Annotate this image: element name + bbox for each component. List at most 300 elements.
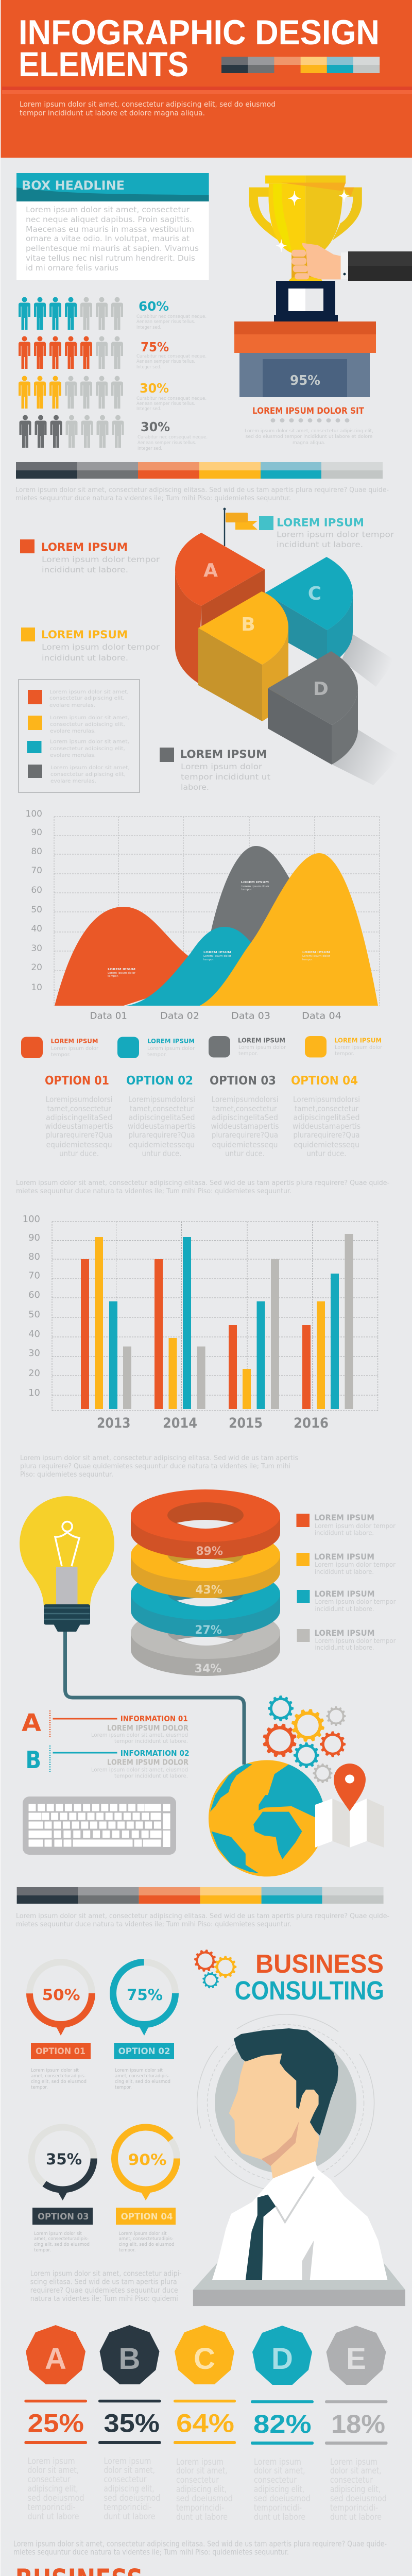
options row: plurarequirere?Qua xyxy=(294,1130,359,1140)
options row: equidemietessequ xyxy=(46,1140,112,1149)
legend box: consectetur adipiscing elit, xyxy=(50,746,125,752)
area chart: 90 xyxy=(31,827,42,838)
paragraph: mietes sequuntur duce natura ta videntes ile; Tum mihi Piso: quidemietes sequuntur. xyxy=(15,495,291,502)
bar chart: 100 xyxy=(23,1214,40,1225)
information A: Lorem ipsum dolor sit amet, eiusmod xyxy=(91,1732,188,1738)
illustration: businessman xyxy=(193,2014,405,2306)
ring chart legend: LOREM IPSUM xyxy=(314,1589,375,1599)
badge D: consectetur xyxy=(254,2475,297,2485)
header banner xyxy=(1,0,412,158)
information B xyxy=(26,1745,190,1780)
options row: widdeustamapertis xyxy=(211,1122,279,1131)
badge C: dunt ut labore xyxy=(176,2512,228,2522)
chart legend tiles: tempor. xyxy=(51,1052,71,1058)
donut 90% option 04: OPTION 04 xyxy=(121,2212,173,2222)
chart legend tiles: Lorem ipsum dolor xyxy=(335,1045,383,1050)
label: teal: LOREM IPSUM xyxy=(277,516,364,529)
chart legend tiles: tempor. xyxy=(147,1052,167,1058)
options row: widdeustamapertis xyxy=(128,1122,196,1131)
chart legend tiles: LOREM IPSUM xyxy=(147,1038,195,1045)
row 30% grey: Aenean semper risus tellus. xyxy=(138,440,196,446)
ring 34% xyxy=(131,1606,280,1676)
bar chart: 30 xyxy=(28,1348,40,1359)
badge B: Lorem ipsum xyxy=(104,2456,151,2467)
badge E: temporincidi- xyxy=(330,2503,378,2513)
information B: Lorem ipsum dolor sit amet, eiusmod xyxy=(91,1767,188,1773)
legend box: Lorem ipsum dolor sit amet, xyxy=(50,739,129,745)
label: yellow: incididunt ut labore. xyxy=(42,653,128,663)
donut 35% option 03: OPTION 03 xyxy=(38,2212,89,2222)
options row: equidemietessequ xyxy=(129,1140,195,1149)
panel: box headline: vitae tellus nec nisl rutrum hendrerit. Duis xyxy=(26,253,195,263)
heading: business consulting xyxy=(193,1948,384,2005)
information B: LOREM IPSUM DOLOR xyxy=(107,1758,188,1767)
label: grey: tempor incididunt ut xyxy=(181,772,270,782)
bar chart: 90 xyxy=(28,1232,40,1243)
options row: adipiscingelitaSed xyxy=(46,1113,112,1122)
badge D: Lorem ipsum xyxy=(254,2457,301,2467)
badge C: sed doeiusmod xyxy=(176,2494,233,2504)
chart legend tiles: LOREM IPSUM xyxy=(238,1037,285,1044)
badge C: C xyxy=(194,2342,215,2376)
options row: tamet,consectetur xyxy=(47,1104,111,1113)
area chart: 70 xyxy=(31,866,42,876)
area chart: tempor. xyxy=(242,888,252,891)
badge E: Lorem ipsum xyxy=(330,2457,377,2467)
badge D: temporincidi- xyxy=(254,2503,302,2513)
area chart: 60 xyxy=(31,885,42,895)
row 60%: Integer sed. xyxy=(136,325,161,330)
donut 50% option 01: Lorem ipsum dolor sit xyxy=(31,2068,79,2073)
badge A xyxy=(24,2325,87,2522)
trophy caption xyxy=(245,406,373,446)
area chart: 50 xyxy=(31,905,42,915)
label: orange xyxy=(20,539,160,574)
badge E: sed doeiusmod xyxy=(330,2494,387,2504)
row 75%: Integer sed. xyxy=(136,365,161,370)
ring chart legend: Lorem ipsum dolor tempor xyxy=(315,1522,396,1530)
badge A: sed doeiusmod xyxy=(28,2493,84,2503)
badge D: dunt ut labore xyxy=(254,2512,305,2522)
row 30% yellow: Aenean semper risus tellus. xyxy=(136,401,195,406)
bar chart: 40 xyxy=(28,1329,40,1340)
label: teal: incididunt ut labore. xyxy=(277,540,363,549)
area chart: LOREM IPSUM xyxy=(241,881,269,884)
area chart: tempor. xyxy=(203,958,214,961)
options row: plurarequirere?Qua xyxy=(129,1130,195,1140)
panel: box headline xyxy=(16,173,209,280)
row 60% xyxy=(19,297,207,330)
badge A: dunt ut labore xyxy=(28,2512,79,2522)
label: orange: Lorem ipsum dolor tempor xyxy=(42,555,160,564)
legend box: evolare merulas. xyxy=(50,753,96,758)
row 60%: 60% xyxy=(139,299,169,314)
label: orange: incididunt ut labore. xyxy=(42,565,128,574)
area chart: LOREM IPSUM xyxy=(302,951,330,954)
panel: box headline: nec neque aliquet dapibus. Proin sagittis. xyxy=(26,215,192,224)
donut 50% option 01: OPTION 01 xyxy=(36,2046,85,2057)
panel: box headline: Maecenas eu mauris in massa vestibulum xyxy=(26,225,194,234)
panel: box headline: id mi ornare felis varius xyxy=(26,263,118,273)
bars 2014 xyxy=(154,1237,205,1409)
paragraph: Piso: quidemietes sequuntur. xyxy=(20,1471,113,1479)
header intro text: Lorem ipsum dolor sit amet, consectetur adipiscing elit, sed do eiusmod xyxy=(20,100,276,109)
badge E: 18% xyxy=(331,2410,385,2438)
paragraph: mietes sequuntur duce natura ta videntes ile; Tum mihi Piso: quidemietes sequuntur. xyxy=(16,1188,291,1195)
header intro text xyxy=(20,100,276,117)
ring chart legend: LOREM IPSUM xyxy=(314,1628,375,1638)
donut 75% option 02: amet, consecteturadipis- xyxy=(115,2074,169,2079)
bar chart: 2015 xyxy=(229,1415,263,1431)
ring 27% xyxy=(131,1567,280,1637)
ring chart legend xyxy=(297,1513,396,1651)
paragraph xyxy=(13,2539,387,2557)
donut 75% option 02: OPTION 02 xyxy=(118,2046,170,2057)
badge B: temporincidi- xyxy=(104,2502,151,2513)
options row: OPTION 04 xyxy=(291,1074,358,1088)
label: teal xyxy=(259,516,394,549)
label: grey: labore. xyxy=(181,783,209,792)
donut 90% option 04: tempor. xyxy=(119,2248,136,2253)
ring 89%: 89% xyxy=(196,1545,223,1558)
chart: isometric blocks A B C D xyxy=(175,508,401,785)
bar chart xyxy=(23,1214,378,1431)
ring chart legend: Lorem ipsum dolor tempor xyxy=(315,1598,396,1605)
information B: tempor incididunt ut labore. xyxy=(114,1773,188,1780)
donut 50% option 01: amet, consecteturadipis- xyxy=(31,2074,85,2079)
trophy caption: LOREM IPSUM DOLOR SIT xyxy=(252,406,364,416)
bars 2013 xyxy=(81,1237,131,1409)
area chart: 80 xyxy=(31,846,42,857)
area chart: 40 xyxy=(31,924,42,934)
flag xyxy=(224,508,258,546)
badge A: 25% xyxy=(28,2409,84,2438)
ring 34%: 34% xyxy=(195,1663,221,1675)
badge E: dolor sit amet, xyxy=(330,2466,381,2476)
options row: equidemietessequ xyxy=(212,1140,278,1149)
paragraph: Lorem ipsum dolor sit amet, consectetur adipiscing elitasa. Sed wid de us tam apertis plura requirere? Quae quide- xyxy=(16,1912,389,1920)
badge C: consectetur xyxy=(176,2475,219,2485)
options row: adipiscingelitaSed xyxy=(212,1113,278,1122)
badge D xyxy=(251,2326,314,2522)
podium with 95%: 95% xyxy=(290,373,320,388)
area chart: tempor. xyxy=(108,975,118,978)
heading: business consulting: BUSINESS xyxy=(255,1949,384,1978)
row 30% yellow: 30% xyxy=(140,381,169,396)
donut 75% option 02: cing elit, sed do eiusmod xyxy=(115,2079,170,2084)
bar chart: 2013 xyxy=(97,1415,131,1431)
donut 90% option 04: amet, consecteturadipis- xyxy=(119,2236,174,2242)
icon: map and location pin xyxy=(315,1764,384,1848)
label: orange: LOREM IPSUM xyxy=(41,541,128,553)
badge C: dolor sit amet, xyxy=(176,2466,228,2476)
badge A: A xyxy=(45,2342,66,2376)
ring chart legend: LOREM IPSUM xyxy=(314,1513,374,1522)
ring 43%: 43% xyxy=(195,1584,222,1597)
area chart: LOREM IPSUM xyxy=(108,968,135,971)
bar chart: 10 xyxy=(28,1387,40,1398)
donut 75% option 02: tempor. xyxy=(115,2085,132,2090)
options row: Loremipsumdolorsi xyxy=(211,1095,278,1104)
ring 27%: 27% xyxy=(195,1624,222,1637)
area chart: Data 04 xyxy=(302,1011,341,1021)
chart legend tiles: Lorem ipsum dolor xyxy=(147,1046,195,1052)
block B: B xyxy=(241,614,255,635)
options row: untur duce. xyxy=(59,1149,99,1158)
badge D: sed doeiusmod xyxy=(254,2494,311,2504)
chart legend tiles: Lorem ipsum dolor xyxy=(238,1045,286,1050)
label: yellow xyxy=(21,628,160,663)
panel: box headline: ornare a vitae odio. In volutpat, mauris at xyxy=(26,234,190,243)
badge D: dolor sit amet, xyxy=(254,2466,305,2476)
bar chart: 50 xyxy=(28,1309,40,1320)
title: INFOGRAPHIC DESIGN xyxy=(19,13,380,52)
chart legend tiles: LOREM IPSUM xyxy=(50,1038,98,1045)
donut 50% option 01: 50% xyxy=(42,1986,80,2004)
row 30% grey: Curabitur nec consequat neque. xyxy=(138,435,208,440)
row 60%: Curabitur nec consequat neque. xyxy=(136,314,207,319)
paragraph: Lorem ipsum dolor sit amet, consectetur adipiscing elitasa. Sed wid de us tam apertis xyxy=(20,1454,298,1462)
row 30% yellow: Curabitur nec consequat neque. xyxy=(136,396,207,401)
donut 75% option 02: 75% xyxy=(127,1986,163,2004)
paragraph: mietes sequuntur duce natura ta videntes ile; Tum mihi Piso: quidemietes sequuntur. xyxy=(13,2548,289,2557)
donut 35% option 03: 35% xyxy=(46,2150,82,2168)
block A: A xyxy=(203,560,218,581)
label: grey: LOREM IPSUM xyxy=(180,748,267,760)
paragraph xyxy=(30,2270,182,2303)
badge D: adipiscing elit, xyxy=(254,2484,304,2495)
heading: business consulting: CONSULTING xyxy=(235,1976,384,2005)
stacked ring chart xyxy=(131,1489,280,1676)
donut 75% option 02: Lorem ipsum dolor sit xyxy=(115,2068,163,2073)
badge C: 64% xyxy=(176,2409,234,2438)
donut 50% option 01 xyxy=(30,1962,92,2090)
badge E: consectetur xyxy=(330,2475,373,2485)
colour strip divider 1 xyxy=(16,462,383,479)
row 30% grey xyxy=(20,415,208,451)
information A: INFORMATION 01 xyxy=(121,1714,188,1723)
row 60%: Aenean semper risus tellus. xyxy=(136,319,195,325)
information B: INFORMATION 02 xyxy=(121,1749,190,1758)
badge C: Lorem ipsum xyxy=(176,2457,224,2467)
donut 50% option 01: cing elit, sed do eiusmod xyxy=(31,2079,87,2084)
paragraph: natura ta videntes ile; Tum mihi Piso: quidemi xyxy=(30,2295,178,2303)
row 30% grey: 30% xyxy=(141,419,170,434)
donut 75% option 02 xyxy=(113,1962,175,2090)
badge E: dunt ut labore xyxy=(330,2512,382,2522)
options row: Loremipsumdolorsi xyxy=(46,1095,113,1104)
block C: C xyxy=(308,583,321,604)
badge A: temporincidi- xyxy=(28,2502,76,2513)
legend box: consectetur adipiscing elit, xyxy=(50,772,126,777)
options row: OPTION 02 xyxy=(126,1074,193,1088)
area chart: 30 xyxy=(31,943,42,954)
chart legend tiles: tempor. xyxy=(335,1051,354,1057)
options row: untur duce. xyxy=(307,1149,346,1158)
legend box: consectetur adipiscing elit, xyxy=(49,696,125,701)
colour strip divider 2 xyxy=(17,1887,384,1904)
paragraph: requirere? Quae quidemietes sequuntur duce xyxy=(30,2286,178,2295)
options row: plurarequirere?Qua xyxy=(46,1130,112,1140)
badge B: 35% xyxy=(104,2409,160,2438)
donut 35% option 03: tempor. xyxy=(34,2248,51,2253)
options row: tamet,consectetur xyxy=(213,1104,277,1113)
badge B: sed doeiusmod xyxy=(104,2493,161,2503)
icon: light bulb with cable xyxy=(20,1496,244,1765)
row 30% yellow xyxy=(19,376,207,412)
area chart: LOREM IPSUM xyxy=(203,951,231,954)
paragraph: Lorem ipsum dolor sit amet, consectetur adipiscing elitasa. Sed wid de us tam apertis plura requirere? Quae quide- xyxy=(16,1179,389,1187)
area chart: tempor. xyxy=(302,958,313,961)
panel: box headline: pellentesque mi mauris at sapien. Vivamus xyxy=(26,244,199,253)
block B xyxy=(198,591,288,721)
options row: OPTION 01 xyxy=(45,1074,109,1088)
ring chart legend: Lorem ipsum dolor tempor xyxy=(315,1561,396,1568)
row 75% xyxy=(19,336,207,370)
badge E xyxy=(325,2326,387,2522)
ring chart legend: Lorem ipsum dolor tempor xyxy=(315,1637,396,1645)
options row: tamet,consectetur xyxy=(295,1104,359,1113)
area chart: Data 03 xyxy=(231,1011,270,1021)
panel: box headline: Lorem ipsum dolor sit amet, consectetur xyxy=(26,205,190,214)
area chart: 100 xyxy=(26,809,42,819)
options row: equidemietessequ xyxy=(294,1140,359,1149)
badge A: adipiscing elit, xyxy=(28,2484,78,2494)
options row: Loremipsumdolorsi xyxy=(128,1095,195,1104)
row 30% yellow: Integer sed. xyxy=(136,406,161,412)
trophy caption: Lorem ipsum dolor sit amet, consectetur adipiscing elit, xyxy=(245,429,373,434)
chart legend tiles: LOREM IPSUM xyxy=(334,1037,382,1044)
row 30% grey: Integer sed. xyxy=(138,446,162,451)
badge E: E xyxy=(346,2342,366,2376)
header intro text: tempor incididunt ut labore et dolore magna aliqua. xyxy=(20,109,205,117)
paragraph xyxy=(16,1179,389,1195)
paragraph xyxy=(16,1912,389,1928)
row 75%: Aenean semper risus tellus. xyxy=(136,359,195,364)
trophy caption: magna aliqua. xyxy=(293,440,325,446)
trophy caption: sed do eiusmod tempor incididunt ut labore et dolore xyxy=(245,434,373,439)
legend box: Lorem ipsum dolor sit amet, xyxy=(49,689,129,695)
header colour swatch strip xyxy=(221,57,380,73)
bar chart: 80 xyxy=(28,1251,40,1262)
legend box: consectetur adipiscing elit, xyxy=(50,722,125,727)
block A xyxy=(175,533,265,683)
legend box: evolare merulas. xyxy=(50,778,96,784)
icon: keyboard xyxy=(23,1797,176,1855)
badge A: dolor sit amet, xyxy=(28,2465,79,2476)
chart legend tiles: tempor. xyxy=(238,1051,258,1057)
label: grey: Lorem ipsum dolor xyxy=(181,762,263,771)
ring 43% xyxy=(131,1529,280,1598)
paragraph: Lorem ipsum dolor sit amet, consectetur adipiscing elitasa. Sed wid de us tam apertis plura requirere? Quae quide- xyxy=(15,486,389,494)
information B: B xyxy=(26,1746,41,1774)
badge A: Lorem ipsum xyxy=(28,2456,75,2467)
bar chart: 2016 xyxy=(294,1415,329,1431)
badge B: consectetur xyxy=(104,2475,146,2485)
badge B: B xyxy=(119,2342,140,2376)
area chart: Lorem ipsum dolor xyxy=(242,885,270,888)
badge B: dunt ut labore xyxy=(104,2512,156,2522)
badge D: 82% xyxy=(253,2410,312,2438)
donut 50% option 01: tempor. xyxy=(31,2085,48,2090)
paragraph: Lorem ipsum dolor sit amet, consectetur adipi- xyxy=(30,2270,182,2278)
paragraph xyxy=(15,486,389,502)
row 75%: 75% xyxy=(141,340,169,354)
options row: untur duce. xyxy=(225,1149,265,1158)
ring chart legend: LOREM IPSUM xyxy=(314,1552,374,1562)
block D xyxy=(268,651,358,765)
label: yellow: Lorem ipsum dolor tempor xyxy=(42,642,160,652)
bar chart: 20 xyxy=(28,1368,40,1379)
bars 2015 xyxy=(229,1259,279,1409)
paragraph: scing elitasa. Sed wid de us tam apertis plura xyxy=(30,2278,177,2286)
area chart: Data 02 xyxy=(160,1011,199,1021)
title: ELEMENTS xyxy=(19,45,188,84)
options row: adipiscingelitaSed xyxy=(294,1113,359,1122)
options row: untur duce. xyxy=(142,1149,181,1158)
badge B: dolor sit amet, xyxy=(104,2465,155,2476)
block D: D xyxy=(313,679,329,700)
information A xyxy=(22,1708,188,1744)
title xyxy=(19,13,380,84)
information A: A xyxy=(22,1708,41,1736)
options row: Loremipsumdolorsi xyxy=(293,1095,360,1104)
area chart: 20 xyxy=(31,962,42,973)
information A: tempor incididunt ut labore. xyxy=(114,1738,188,1744)
donut 35% option 03: amet, consecteturadipis- xyxy=(34,2236,89,2242)
area chart: Data 01 xyxy=(90,1011,127,1021)
donut 90% option 04: cing elit, sed do eiusmod xyxy=(119,2242,175,2247)
donut 35% option 03: Lorem ipsum dolor sit xyxy=(34,2231,82,2236)
bar chart: 60 xyxy=(28,1290,40,1300)
legend box: Lorem ipsum dolor sit amet, xyxy=(50,715,129,721)
donut 35% option 03: cing elit, sed do eiusmod xyxy=(34,2242,90,2247)
area chart xyxy=(26,809,380,1021)
badge B: adipiscing elit, xyxy=(104,2484,154,2494)
ring chart legend: incididunt ut labore. xyxy=(315,1644,374,1651)
panel: box headline: BOX HEADLINE xyxy=(22,178,125,193)
badge C: temporincidi- xyxy=(176,2503,224,2513)
badge D: D xyxy=(271,2342,293,2376)
badge E: adipiscing elit, xyxy=(330,2484,381,2495)
legend box xyxy=(19,680,140,792)
icon: cluster of gears xyxy=(259,1696,346,1783)
podium with 95% xyxy=(234,321,376,397)
ring chart legend: incididunt ut labore. xyxy=(315,1605,374,1613)
badge group xyxy=(24,2325,387,2522)
options row: adipiscingelitaSed xyxy=(129,1113,195,1122)
chart legend tiles: Lorem ipsum dolor xyxy=(51,1046,99,1052)
bar chart: 70 xyxy=(28,1270,40,1281)
options row: tamet,consectetur xyxy=(130,1104,194,1113)
bars 2016 xyxy=(302,1234,353,1409)
badge B xyxy=(98,2325,161,2522)
legend box: evolare merulas. xyxy=(49,703,95,708)
label: yellow: LOREM IPSUM xyxy=(41,629,128,641)
area chart: 10 xyxy=(31,982,42,993)
options row: OPTION 03 xyxy=(210,1074,276,1088)
donut 35% option 03 xyxy=(31,2127,94,2253)
ring 89% xyxy=(131,1489,280,1559)
ring chart legend: incididunt ut labore. xyxy=(315,1529,374,1536)
paragraph xyxy=(20,1454,298,1479)
information A: LOREM IPSUM DOLOR xyxy=(107,1723,188,1733)
legend box: Lorem ipsum dolor sit amet, xyxy=(50,765,130,771)
badge A: consectetur xyxy=(28,2475,71,2485)
paragraph: mietes sequuntur duce natura ta videntes ile; Tum mihi Piso: quidemietes sequuntur. xyxy=(16,1921,291,1928)
donut 90% option 04: Lorem ipsum dolor sit xyxy=(119,2231,167,2236)
icon: trophy held by hand xyxy=(249,176,412,321)
